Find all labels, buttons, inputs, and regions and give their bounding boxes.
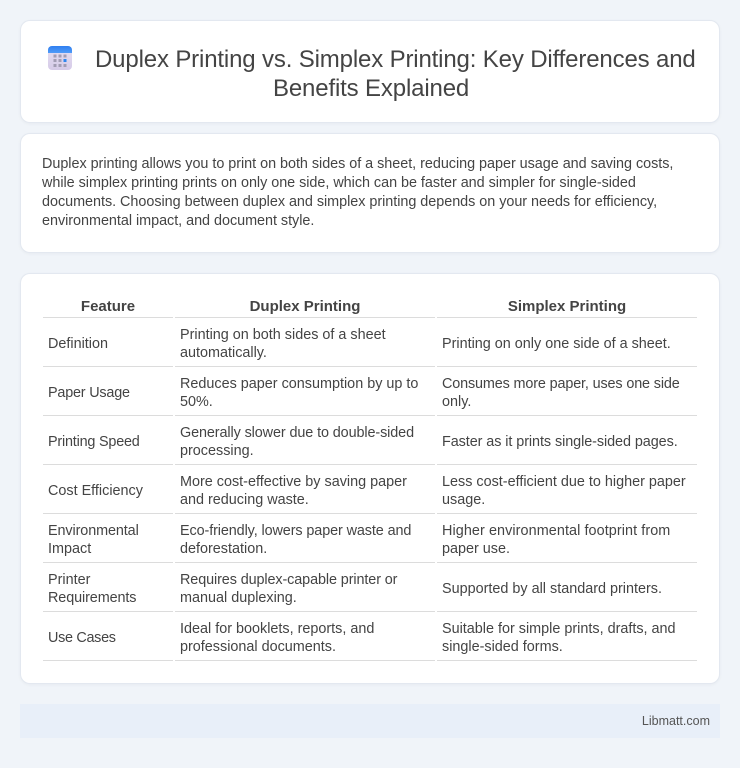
row: paper usage: Paper Usage <box>48 385 130 401</box>
printing speed duplex: processing. <box>180 443 254 459</box>
definition duplex: Printing on both sides of a sheet <box>180 327 386 343</box>
row: use cases: Use Cases <box>48 630 116 646</box>
printer requirements duplex: manual duplexing. <box>180 590 297 606</box>
printer requirements simplex: Supported by all standard printers. <box>442 581 662 597</box>
row: environmental impact: Environmental <box>48 523 139 539</box>
use cases simplex: Suitable for simple prints, drafts, and <box>442 621 676 637</box>
row: printer requirements: Requirements <box>48 590 136 606</box>
cost efficiency simplex: Less cost-efficient due to higher paper <box>442 474 686 490</box>
intro text: documents. Choosing between duplex and simplex printing depends on your needs for efficiency, <box>42 194 657 210</box>
table header: simplex: Simplex Printing <box>508 298 626 315</box>
cost efficiency simplex <box>442 474 686 508</box>
intro text: environmental impact, and document style. <box>42 213 314 229</box>
row: printer requirements: Printer <box>48 572 90 588</box>
cost efficiency duplex: and reducing waste. <box>180 492 309 508</box>
row: printing speed: Printing Speed <box>48 434 140 450</box>
intro text <box>42 156 673 229</box>
use cases simplex <box>442 621 676 655</box>
row: environmental impact: Impact <box>48 541 91 557</box>
title: Benefits Explained <box>273 75 469 102</box>
footer bar <box>20 704 720 738</box>
use cases duplex: Ideal for booklets, reports, and <box>180 621 374 637</box>
paper usage simplex: only. <box>442 394 471 410</box>
icon: calendar <box>48 46 72 70</box>
intro panel <box>20 133 720 253</box>
cost efficiency duplex: More cost-effective by saving paper <box>180 474 407 490</box>
row: definition: Definition <box>48 336 108 352</box>
header panel <box>20 20 720 123</box>
cost efficiency simplex: usage. <box>442 492 485 508</box>
printing speed simplex: Faster as it prints single-sided pages. <box>442 434 678 450</box>
printer requirements duplex <box>180 572 398 606</box>
row: cost efficiency: Cost Efficiency <box>48 483 143 499</box>
row: printer requirements <box>48 572 136 606</box>
use cases duplex <box>180 621 374 655</box>
environmental impact simplex <box>442 523 670 557</box>
definition duplex: automatically. <box>180 345 267 361</box>
paper usage simplex <box>442 376 680 410</box>
paper usage duplex: 50%. <box>180 394 213 410</box>
environmental impact duplex: deforestation. <box>180 541 267 557</box>
row: environmental impact <box>48 523 139 557</box>
table panel <box>20 273 720 684</box>
table header: feature: Feature <box>81 298 135 315</box>
environmental impact simplex: Higher environmental footprint from <box>442 523 670 539</box>
table header: duplex: Duplex Printing <box>250 298 360 315</box>
printing speed duplex: Generally slower due to double-sided <box>180 425 414 441</box>
environmental impact duplex <box>180 523 411 557</box>
intro text: Duplex printing allows you to print on both sides of a sheet, reducing paper usage and saving costs, <box>42 156 673 172</box>
environmental impact duplex: Eco-friendly, lowers paper waste and <box>180 523 411 539</box>
use cases duplex: professional documents. <box>180 639 336 655</box>
printer requirements duplex: Requires duplex-capable printer or <box>180 572 397 588</box>
use cases simplex: single-sided forms. <box>442 639 563 655</box>
paper usage simplex: Consumes more paper, uses one side <box>442 376 680 392</box>
title <box>95 46 696 102</box>
printing speed duplex <box>180 425 414 459</box>
definition duplex <box>180 327 386 361</box>
definition simplex: Printing on only one side of a sheet. <box>442 336 671 352</box>
environmental impact simplex: paper use. <box>442 541 510 557</box>
cost efficiency duplex <box>180 474 407 508</box>
title: Duplex Printing vs. Simplex Printing: Key Differences and <box>95 46 696 73</box>
footer text: Libmatt.com <box>642 714 710 728</box>
intro text: while simplex printing prints on only one side, which can be faster and simpler for single-sided <box>42 175 636 191</box>
paper usage duplex: Reduces paper consumption by up to <box>180 376 418 392</box>
paper usage duplex <box>180 376 418 410</box>
